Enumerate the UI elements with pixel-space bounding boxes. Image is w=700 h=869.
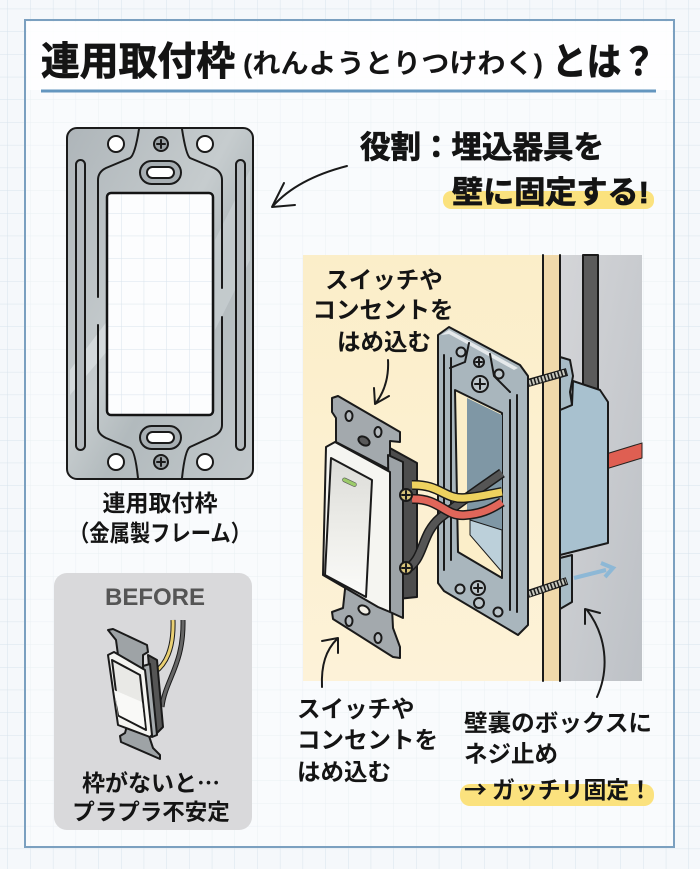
wires <box>405 473 502 570</box>
highlight: role <box>443 191 654 209</box>
yoke screws <box>346 411 352 421</box>
dark cable <box>583 255 598 400</box>
switch housing <box>388 447 417 600</box>
arrow: box label to bracket <box>585 609 605 697</box>
panel: before <box>54 573 252 830</box>
metal frame illustration <box>67 128 253 479</box>
arrow: lower label to switch <box>322 638 338 687</box>
frame caption: （金属製フレーム） <box>69 520 251 546</box>
label: top insert: スイッチや <box>325 267 443 293</box>
switch upper yoke <box>332 396 400 470</box>
blue arrow <box>574 563 613 578</box>
role heading: 役割：埋込器具を <box>360 130 604 165</box>
lower bracket <box>560 555 572 609</box>
frame caption: 連用取付枠 <box>102 490 218 516</box>
before caption: 枠がないと… <box>82 764 220 798</box>
wall front <box>303 255 543 681</box>
switch body <box>323 442 390 612</box>
upper bracket <box>560 357 573 410</box>
title: 連用取付枠 <box>41 41 235 84</box>
junction box <box>560 381 608 555</box>
title: とは？ <box>552 42 656 84</box>
label: lower insert: スイッチや <box>297 696 414 722</box>
label: screw to box: ネジ止め <box>464 741 558 767</box>
arrow: role to frame <box>272 166 347 207</box>
wall edge <box>543 255 560 681</box>
label: lower insert: はめ込む <box>297 759 391 785</box>
terminals <box>400 489 412 574</box>
label: lower insert <box>297 696 438 785</box>
mounting screws <box>528 372 567 383</box>
label: screw to box: 壁裏のボックスに <box>464 709 652 736</box>
switch side strip <box>388 455 403 618</box>
switch rocker <box>325 458 372 597</box>
role heading: 壁に固定する! <box>452 175 649 210</box>
label: top insert: コンセントを <box>312 297 454 323</box>
label: top insert <box>312 267 454 355</box>
label: top insert: はめ込む <box>337 329 431 355</box>
panel: before: プラプラ不安定 <box>72 800 230 825</box>
illustration panel: installation <box>303 255 642 681</box>
red cable <box>606 443 642 469</box>
title <box>27 22 672 90</box>
label: screw to box <box>460 709 654 806</box>
role heading <box>360 130 654 210</box>
icon: loose switch <box>108 620 183 759</box>
wall back <box>560 255 642 681</box>
before heading: BEFORE <box>105 584 205 611</box>
arrow: top label to switch <box>374 360 389 404</box>
indicator <box>342 477 357 487</box>
mounting frame <box>438 327 528 635</box>
title: (れんようとりつけわく) <box>243 49 543 79</box>
label: screw to box: → ガッチリ固定！ <box>464 771 652 805</box>
label: lower insert: コンセントを <box>297 727 438 753</box>
title underline <box>41 90 656 92</box>
switch lower yoke <box>332 580 400 658</box>
frame caption <box>69 490 251 546</box>
highlight: firm fix <box>460 784 654 806</box>
